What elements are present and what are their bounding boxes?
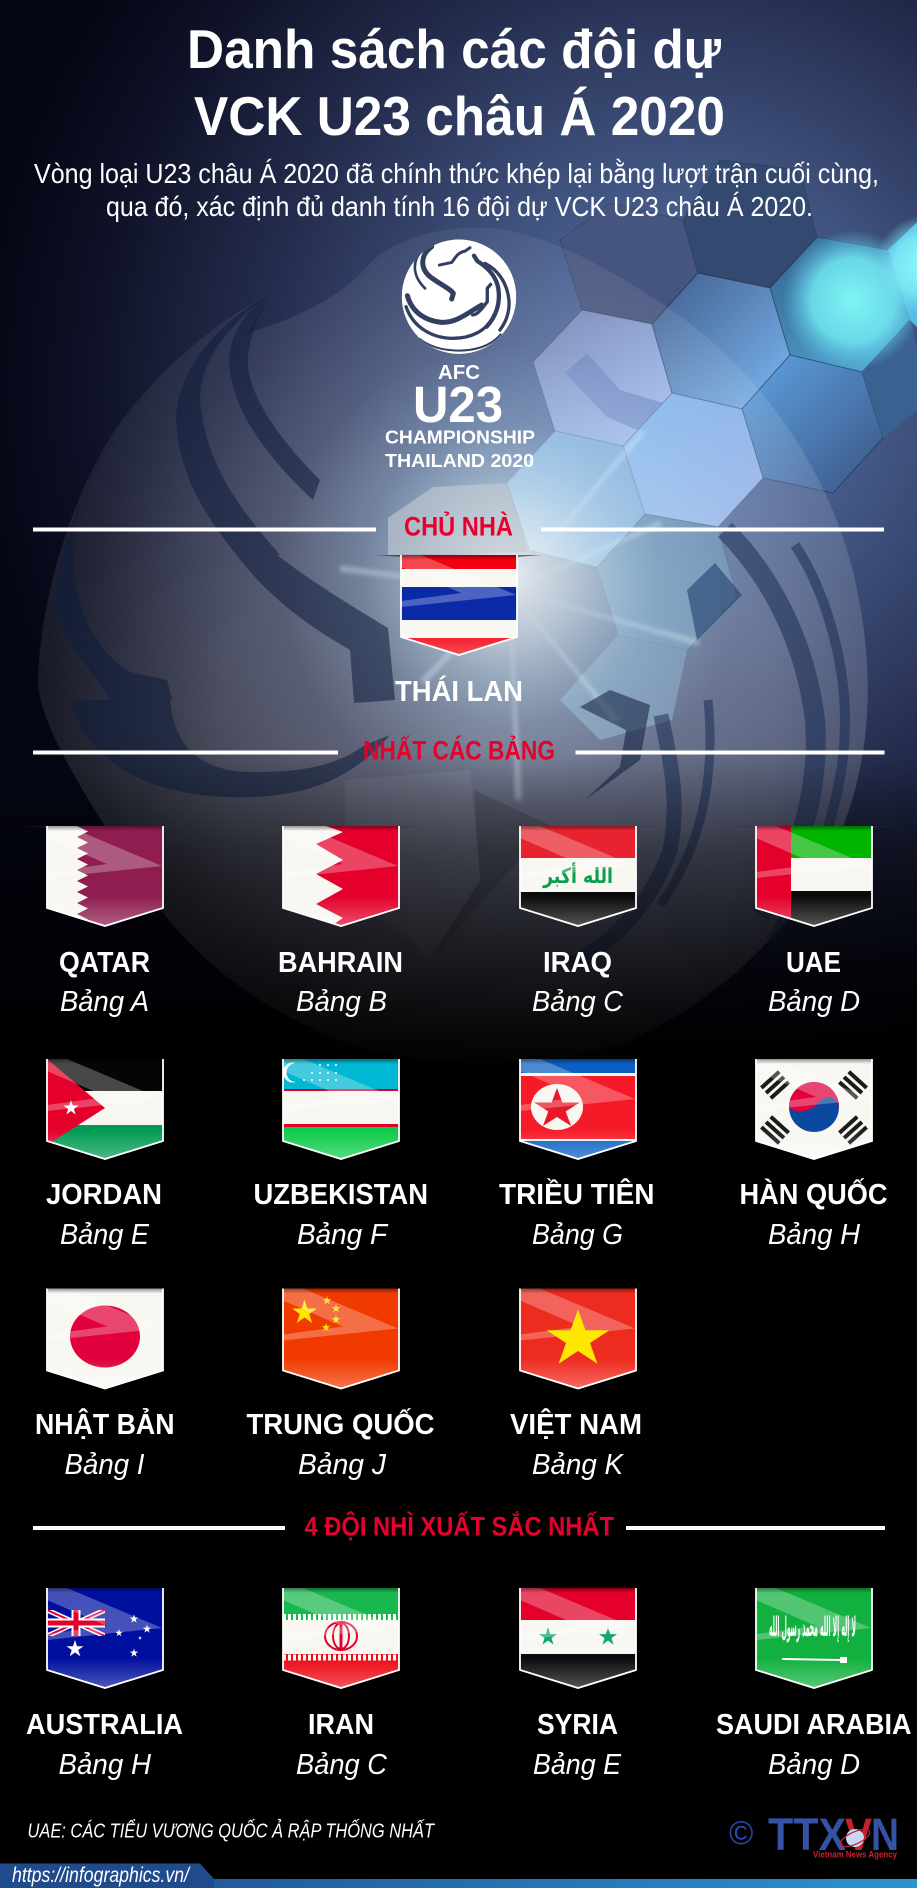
team: Saudi Arabia bbox=[716, 1588, 912, 1781]
team: Australia bbox=[26, 1588, 183, 1781]
intro text: qua đó, xác định đủ danh tính 16 đội dự VCK U23 châu Á 2020. bbox=[106, 191, 813, 222]
flag: Bahrain bbox=[282, 826, 420, 927]
team: Syria bbox=[520, 1588, 636, 1781]
title: Danh sách các đội dự bbox=[187, 18, 721, 80]
group label: Bảng C bbox=[532, 986, 624, 1018]
group label: Bảng E bbox=[60, 1219, 150, 1251]
team: China bbox=[246, 1288, 435, 1481]
flag: Syria bbox=[520, 1588, 636, 1688]
section heading: chủ nhà bbox=[33, 510, 884, 542]
logo: TTXVN: TTX bbox=[768, 1809, 846, 1860]
team: South Korea bbox=[740, 1059, 888, 1251]
flag: South Korea bbox=[756, 1059, 872, 1159]
flag: Japan bbox=[47, 1288, 163, 1388]
name: UAE bbox=[786, 947, 841, 979]
name: JORDAN bbox=[46, 1179, 162, 1211]
team: Iraq bbox=[519, 826, 657, 1017]
footer bar with URL: https://infographics.vn/ bbox=[12, 1864, 191, 1887]
title: VCK U23 châu Á 2020 bbox=[194, 85, 725, 147]
name: QATAR bbox=[59, 947, 150, 979]
team: North Korea bbox=[499, 1059, 654, 1251]
footnote: UAE: CÁC TIỂU VƯƠNG QUỐC Ả RẬP THỐNG NHẤT bbox=[28, 1818, 435, 1842]
team: Qatar bbox=[26, 826, 164, 1017]
name: UZBEKISTAN bbox=[254, 1179, 428, 1211]
group label: Bảng E bbox=[533, 1749, 622, 1781]
name: HÀN QUỐC bbox=[740, 1177, 888, 1211]
team: Uzbekistan bbox=[254, 1059, 428, 1251]
group label: Bảng C bbox=[296, 1749, 388, 1781]
team: Thailand bbox=[376, 555, 542, 708]
team: Japan bbox=[35, 1288, 174, 1481]
group label: Bảng J bbox=[298, 1449, 386, 1481]
flag: Jordan bbox=[47, 1059, 163, 1159]
logo: AFC U23 Championship: THAILAND 2020 bbox=[385, 451, 534, 471]
group label: Bảng H bbox=[58, 1749, 151, 1781]
team: UAE bbox=[731, 826, 897, 1018]
group label: Bảng K bbox=[532, 1449, 625, 1481]
section heading: 4 đội nhì xuất sắc nhất: 4 ĐỘI NHÌ XUẤT SẮC NHẤT bbox=[304, 1510, 614, 1542]
logo: AFC U23 Championship: U23 bbox=[413, 376, 503, 433]
group label: Bảng A bbox=[60, 986, 149, 1018]
logo: AFC U23 Championship: CHAMPIONSHIP bbox=[385, 428, 535, 448]
section heading: nhất các bảng: NHẤT CÁC BẢNG bbox=[363, 734, 555, 766]
name: IRAN bbox=[308, 1709, 374, 1741]
section heading: nhất các bảng bbox=[33, 734, 884, 766]
flag: Qatar bbox=[26, 826, 164, 927]
flag: Uzbekistan bbox=[283, 1059, 399, 1159]
group label: Bảng D bbox=[768, 986, 860, 1018]
team: Iran bbox=[283, 1588, 399, 1781]
name: TRIỀU TIÊN bbox=[499, 1177, 654, 1211]
name: IRAQ bbox=[543, 947, 612, 979]
flag: Iran bbox=[283, 1588, 399, 1688]
flag: Saudi Arabia bbox=[756, 1588, 872, 1688]
flag: Thailand bbox=[376, 555, 542, 655]
flag: Vietnam bbox=[520, 1288, 636, 1388]
flag: Australia bbox=[47, 1588, 163, 1688]
logo: TTXVN: © bbox=[729, 1814, 753, 1851]
flag: China bbox=[283, 1288, 399, 1388]
group label: Bảng H bbox=[768, 1219, 860, 1251]
name: TRUNG QUỐC bbox=[246, 1407, 435, 1441]
footer bar with URL bbox=[0, 1864, 917, 1888]
flag: Iraq: الله أكبر bbox=[542, 861, 613, 888]
group label: Bảng G bbox=[532, 1219, 623, 1251]
logo: AFC U23 Championship: AFC bbox=[438, 361, 480, 384]
group label: Bảng F bbox=[297, 1219, 389, 1251]
logo: AFC U23 Championship bbox=[385, 239, 535, 471]
name: SYRIA bbox=[537, 1709, 618, 1741]
team: Bahrain bbox=[280, 826, 420, 1017]
flag: UAE bbox=[731, 826, 897, 926]
title bbox=[187, 18, 725, 147]
logo: TTXVN: V bbox=[845, 1809, 872, 1860]
section heading: 4 đội nhì xuất sắc nhất bbox=[33, 1510, 885, 1542]
flag: North Korea bbox=[520, 1059, 636, 1159]
group label: Bảng I bbox=[64, 1449, 144, 1481]
group label: Bảng D bbox=[768, 1749, 860, 1781]
section heading: chủ nhà: CHỦ NHÀ bbox=[404, 510, 513, 542]
logo: TTXVN bbox=[729, 1809, 899, 1860]
intro text bbox=[34, 158, 879, 222]
name: AUSTRALIA bbox=[26, 1709, 183, 1741]
name: THÁI LAN bbox=[395, 674, 523, 708]
name: NHẬT BẢN bbox=[35, 1407, 174, 1441]
logo: TTXVN: Vietnam News Agency bbox=[813, 1850, 897, 1860]
name: VIỆT NAM bbox=[510, 1407, 642, 1441]
team: Jordan bbox=[46, 1059, 163, 1251]
logo: TTXVN: N bbox=[871, 1809, 899, 1860]
team: Vietnam bbox=[510, 1288, 642, 1481]
name: BAHRAIN bbox=[278, 947, 403, 979]
group label: Bảng B bbox=[296, 986, 387, 1018]
flag: Iraq bbox=[519, 826, 657, 927]
